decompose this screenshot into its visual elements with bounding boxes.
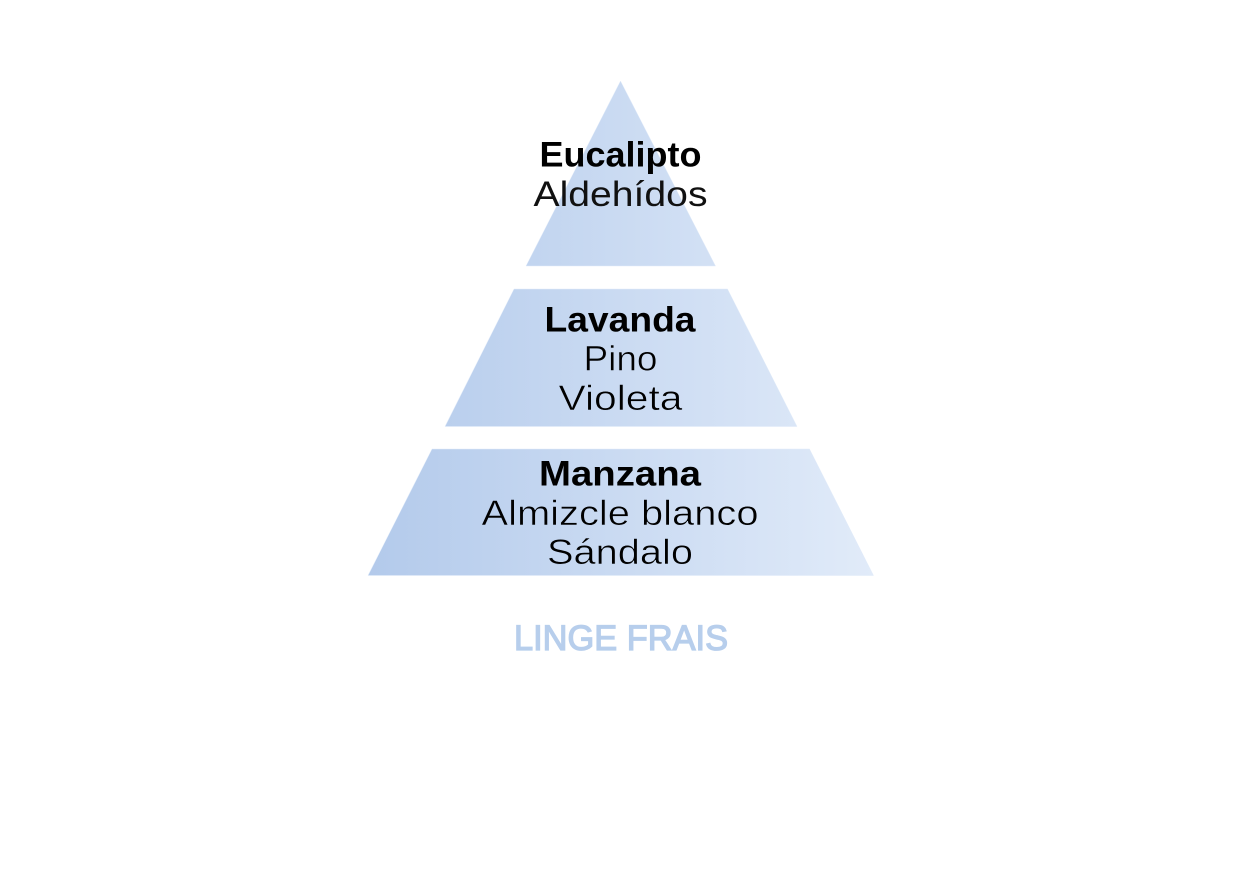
bottom tier text: Almizcle blanco [482,494,758,533]
middle tier text: Pino [584,340,658,378]
bottom tier text: Sándalo [547,533,693,572]
bottom tier text [482,454,758,572]
bottom tier text: Manzana [539,454,702,494]
middle tier text [544,300,696,418]
pyramid tier: middle [445,289,797,426]
pyramid tier: top [526,81,716,266]
top tier text: Eucalipto [540,136,702,174]
top tier text [534,136,708,214]
pyramid tier: bottom [368,449,874,576]
top tier text: Aldehídos [534,175,708,214]
middle tier text: Lavanda [544,300,696,340]
middle tier text: Violeta [558,379,683,418]
product title: LINGE FRAIS [514,619,728,658]
